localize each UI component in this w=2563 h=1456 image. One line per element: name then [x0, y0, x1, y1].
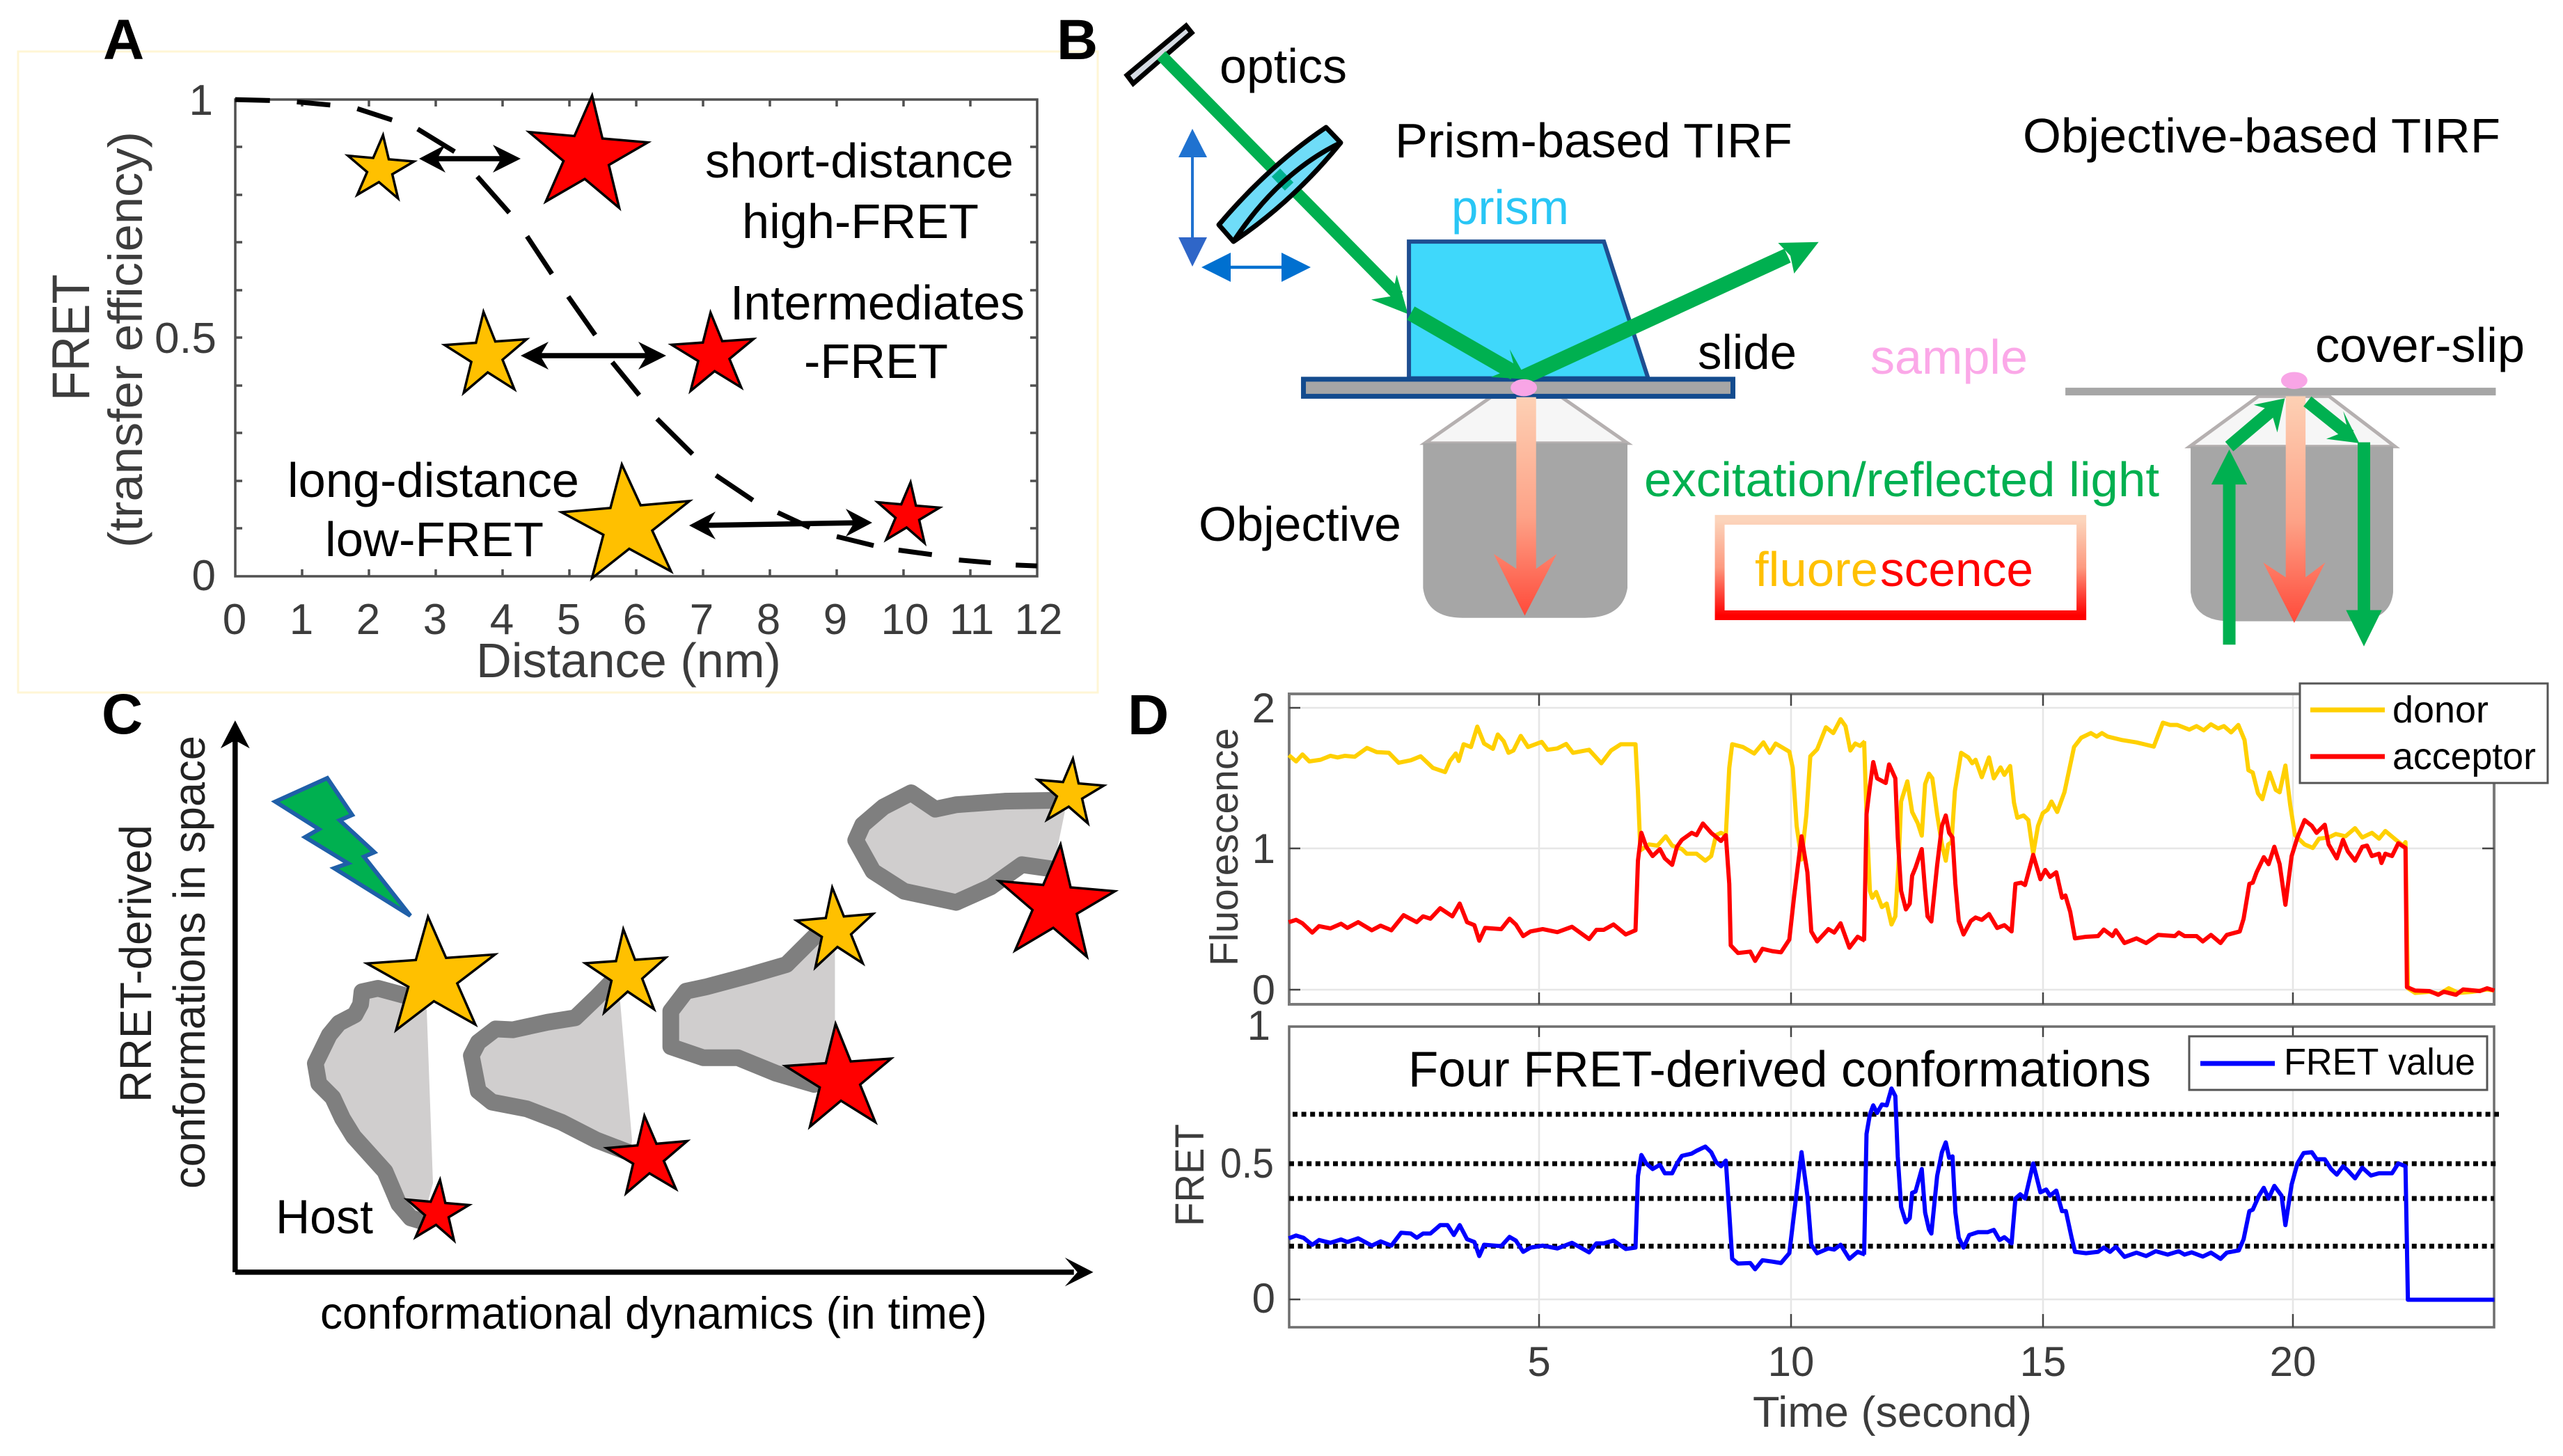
y tick labels [1252, 685, 1275, 1013]
text: fluorescence: scence [1880, 542, 2033, 596]
x axis title: conformational dynamics (in time) [320, 1288, 987, 1338]
axes frame and ticks [1289, 694, 2494, 1004]
x tick labels: 1 [290, 596, 313, 644]
x tick labels: 5 [557, 596, 581, 644]
y tick labels: 2 [1252, 685, 1275, 731]
mirror [1127, 26, 1192, 84]
legend: FRET value [2189, 1036, 2487, 1090]
axes frame and ticks [1289, 1027, 2494, 1327]
y axis title [111, 736, 214, 1189]
star: acceptor 4 [993, 839, 1119, 958]
text: long-distance low-FRET: low-FRET [325, 512, 544, 567]
fluorescence arrow, objective side [2263, 396, 2326, 623]
star: donor intermediate [443, 309, 530, 394]
text: short-distance high-FRET: high-FRET [742, 194, 979, 248]
excitation beam rising [2211, 398, 2285, 644]
grid lines [1289, 694, 2494, 1004]
text: long-distance low-FRET: long-distance [287, 453, 579, 507]
text: Host: Host [276, 1190, 373, 1244]
cover-slip [2065, 388, 2495, 395]
y axis title: Fluorescence [1202, 728, 1247, 966]
sample droplet [1511, 379, 1537, 396]
FRET chart [1167, 1002, 2499, 1437]
x tick labels: 9 [823, 596, 847, 644]
donor trace [1288, 719, 2494, 994]
y axis title FRET: FRET [42, 274, 101, 401]
x tick labels: 2 [356, 596, 380, 644]
chart title: Four FRET-derived conformations [1408, 1042, 2151, 1098]
star: acceptor 3 [783, 1020, 895, 1128]
text: intermediates -FRET: -FRET [804, 334, 948, 388]
objective cone, prism side [1425, 397, 1627, 443]
double arrow: intermediate [521, 342, 666, 370]
incident green beam [1161, 56, 1408, 314]
fluorescence chart [1202, 683, 2548, 1013]
blob 4 [855, 793, 1065, 903]
FRET trace [1288, 1089, 2494, 1300]
panel B: TIRF optics schematic [1057, 8, 2525, 647]
x axis title: Distance (nm) [476, 633, 781, 688]
star: donor 3 [794, 884, 877, 969]
y tick labels: 1 [1247, 1002, 1270, 1049]
x tick labels: 10 [881, 596, 929, 644]
axes arrows [221, 720, 1094, 1286]
y tick labels: 1 [189, 77, 213, 125]
x tick labels [223, 596, 1062, 644]
text: cover-slip: cover-slip [2315, 318, 2525, 372]
star: large acceptor high-FRET [523, 90, 652, 210]
x axis title: Time (second) [1753, 1388, 2032, 1437]
sample droplet on cover-slip [2281, 372, 2308, 389]
text: Objective-based TIRF: Objective-based TIRF [2023, 109, 2500, 163]
reflected beam [1524, 242, 1819, 377]
text: fluorescence [1755, 542, 2033, 596]
horizontal translation arrow [1201, 253, 1311, 282]
dotted FRET state levels [1289, 1114, 2499, 1246]
star: large donor low-FRET [558, 459, 695, 580]
star: acceptor intermediate [670, 310, 757, 392]
star: donor 4 [1034, 756, 1106, 824]
x tick labels: 4 [490, 596, 514, 644]
legend: donor and acceptor: donor [2392, 689, 2489, 731]
y tick labels: 0 [1252, 967, 1275, 1013]
text: slide: slide [1698, 325, 1797, 379]
blob 2 [471, 980, 632, 1153]
fluorescence legend box [1720, 520, 2081, 615]
y axis title: RRET-derived [111, 825, 161, 1102]
reflected beam descending [2308, 402, 2382, 647]
label C: C [102, 683, 143, 746]
star: acceptor 2 [604, 1112, 691, 1194]
text: sample: sample [1870, 330, 2028, 384]
x tick labels: 11 [949, 596, 994, 644]
axes box with ticks [235, 100, 1037, 576]
x tick labels: 6 [623, 596, 647, 644]
star: donor 1 [364, 912, 500, 1031]
y tick labels: 0 [192, 552, 216, 600]
prism [1409, 242, 1648, 379]
star: small acceptor low-FRET [874, 480, 942, 544]
y tick labels: 1 [1252, 825, 1275, 872]
label B: B [1057, 8, 1098, 72]
x tick labels: 0 [223, 596, 246, 644]
optics drawing in panel coordinates [1161, 56, 2495, 647]
x tick labels: 7 [690, 596, 713, 644]
star: acceptor 1 [404, 1177, 471, 1242]
legend: FRET value: FRET value [2284, 1041, 2475, 1083]
text: long-distance low-FRET [287, 453, 579, 567]
legend: donor and acceptor: acceptor [2392, 736, 2536, 777]
objective cone, objective side [2190, 396, 2395, 447]
y tick labels [155, 77, 216, 600]
objective body, objective side [2191, 447, 2393, 622]
panel D: single-molecule traces [1128, 683, 2548, 1437]
label D: D [1128, 683, 1169, 747]
x tick labels: 8 [757, 596, 780, 644]
x tick labels: 5 [1527, 1338, 1551, 1385]
slide [1304, 379, 1733, 396]
text: Prism-based TIRF: Prism-based TIRF [1395, 113, 1792, 168]
x tick labels: 10 [1768, 1338, 1814, 1385]
text: fluorescence: fluore [1755, 542, 1878, 596]
acceptor trace [1288, 762, 2494, 995]
text: short-distance high-FRET: short-distance [705, 134, 1014, 188]
y tick labels: 0.5 [1220, 1140, 1274, 1187]
y axis title: FRET [1167, 1124, 1213, 1226]
x tick labels: 20 [2270, 1338, 2316, 1385]
double arrow: high-FRET [419, 145, 521, 173]
legend: donor and acceptor [2300, 683, 2548, 783]
fluorescence arrow, prism side [1494, 397, 1556, 616]
text: excitation/reflected light: excitation/reflected light [1644, 452, 2159, 507]
text: prism: prism [1451, 180, 1569, 235]
panel A frame [18, 52, 1098, 693]
vertical translation arrow [1178, 129, 1207, 267]
blob 3 [671, 933, 835, 1084]
grid lines [1289, 1027, 2494, 1327]
star: small donor high-FRET [345, 132, 416, 200]
double arrow: low-FRET [689, 509, 872, 539]
text: Objective: Objective [1199, 497, 1401, 551]
x tick labels [1527, 1338, 2316, 1385]
y tick labels: 0 [1252, 1275, 1275, 1322]
host shapes [471, 793, 1065, 1153]
panel C: conformational dynamics [102, 683, 1119, 1338]
lens [1219, 127, 1341, 242]
blob 1 [315, 988, 433, 1221]
y axis title: conformations in space [164, 736, 214, 1189]
text: optics: optics [1220, 39, 1347, 93]
y tick labels: 0.5 [155, 315, 216, 363]
beam inside prism [1411, 313, 1527, 379]
x tick labels: 15 [2020, 1338, 2066, 1385]
icon: lightning bolt [276, 778, 411, 916]
x tick labels: 12 [1015, 596, 1062, 644]
x tick labels: 3 [423, 596, 447, 644]
dashed FRET curve [235, 100, 1037, 566]
text: intermediates -FRET: Intermediates [730, 276, 1025, 330]
star: donor 2 [583, 926, 670, 1014]
text: intermediates -FRET [730, 276, 1025, 388]
objective body, prism side [1423, 443, 1627, 618]
y axis subtitle: (transfer efficiency) [99, 132, 152, 548]
y tick labels [1220, 1002, 1275, 1322]
text: short-distance high-FRET [705, 134, 1014, 248]
panel A: FRET versus distance [18, 8, 1098, 693]
label A: A [103, 8, 144, 72]
